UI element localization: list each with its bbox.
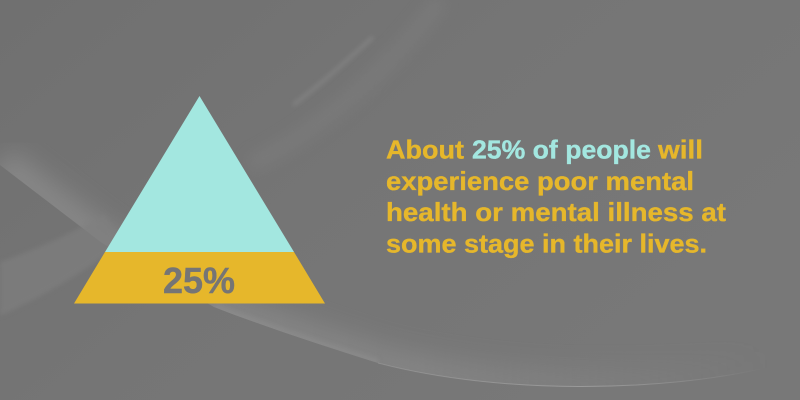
infographic canvas bbox=[4, 96, 736, 387]
background swoosh: lower sweep bbox=[0, 165, 765, 387]
line 1 bbox=[386, 134, 703, 164]
line 1: will bbox=[657, 134, 703, 164]
pyramid upper segment: 75% bbox=[105, 96, 294, 252]
background swoosh: upper streak bbox=[250, 0, 440, 165]
line 3: health or mental illness at bbox=[386, 197, 726, 227]
line 1: About bbox=[386, 134, 464, 164]
line 2: experience poor mental bbox=[386, 166, 694, 196]
statement text bbox=[386, 134, 726, 258]
line 1: 25% of people bbox=[472, 134, 651, 164]
line 4: some stage in their lives. bbox=[386, 228, 707, 258]
pyramid chart bbox=[74, 96, 325, 304]
pyramid lower segment: 25% bbox=[74, 252, 325, 304]
pyramid label: 25% bbox=[163, 260, 235, 301]
